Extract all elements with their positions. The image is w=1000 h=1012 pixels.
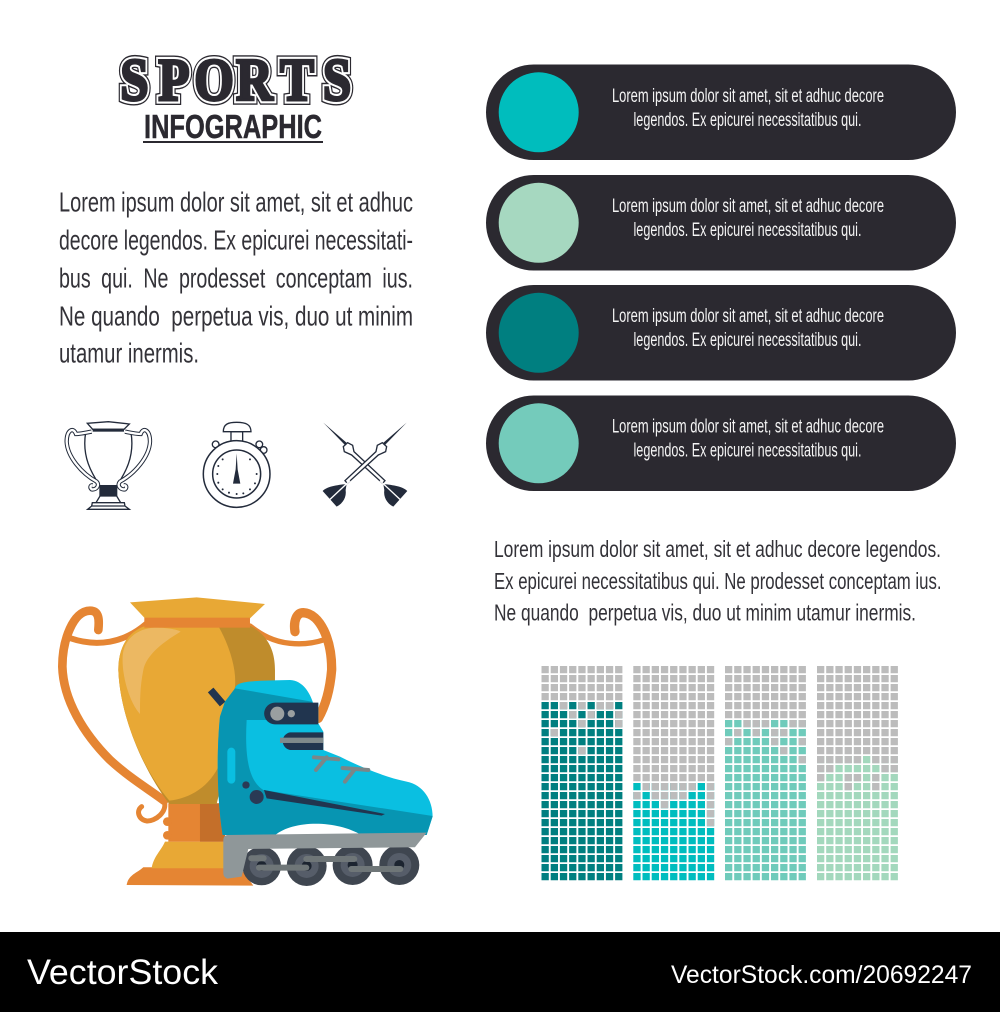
panel: legend pill 2: legendos. Ex epicurei necessitatibus qui. (634, 220, 862, 241)
chart: waffle column cyan (633, 670, 716, 877)
panel: legend pill 1 (486, 64, 956, 160)
chart: waffle column mint (725, 670, 808, 877)
illustration: gold trophy (62, 597, 332, 886)
trophy base (127, 867, 253, 886)
text block: left paragraph: bus qui. Ne prodesset conceptam ius. (59, 262, 413, 294)
skate tongue strap (211, 690, 223, 704)
trophy bowl (118, 626, 275, 804)
text block: lower right paragraph (494, 536, 942, 626)
trophy handles (62, 611, 332, 821)
panel: legend pill 4: legendos. Ex epicurei necessitatibus qui. (634, 440, 862, 462)
title: SPORTS INFOGRAPHIC (120, 47, 351, 145)
panel: legend pill 4 (486, 396, 956, 491)
footer: watermark bar: VectorStock.com/20692247 (671, 961, 972, 989)
icon: outline trophy (67, 422, 150, 509)
chart: waffle column pale green (817, 670, 900, 877)
trophy lip (130, 597, 265, 618)
heading: SPORTS varsity lettering: SPORTS (120, 47, 351, 114)
footer: watermark bar: VectorStock (27, 953, 219, 992)
panel: legend pill 2 (486, 175, 956, 270)
skate wheels (242, 845, 419, 886)
skate frame (223, 833, 427, 879)
heading: SPORTS varsity lettering: SPORTS (120, 47, 351, 114)
skate details (227, 748, 235, 784)
heading: SPORTS varsity lettering: SPORTS (120, 47, 351, 114)
text block: left paragraph: Lorem ipsum dolor sit amet, sit et adhuc (59, 186, 413, 218)
panel: legend pill 3 (486, 285, 956, 380)
text block: left paragraph: Ne quando perpetua vis, duo ut minim (59, 300, 413, 332)
skate laces (314, 757, 368, 782)
panel: legend pill 1: legendos. Ex epicurei necessitatibus qui. (634, 110, 862, 131)
chart: waffle column dark teal (542, 670, 624, 877)
footer: watermark bar (0, 932, 1000, 1012)
subheading: INFOGRAPHIC: INFOGRAPHIC (144, 108, 322, 145)
icon: stopwatch (203, 422, 270, 507)
panel: legend pill 3: legendos. Ex epicurei necessitatibus qui. (634, 330, 862, 351)
text block: left paragraph: decore legendos. Ex epicurei necessitati- (59, 224, 413, 256)
text block: left paragraph: utamur inermis. (59, 338, 199, 368)
text block: left paragraph (59, 186, 413, 368)
icon: crossed darts (323, 423, 407, 507)
illustration: inline skate (211, 680, 433, 886)
skate buckle straps (264, 703, 318, 724)
skate boot (218, 680, 433, 835)
